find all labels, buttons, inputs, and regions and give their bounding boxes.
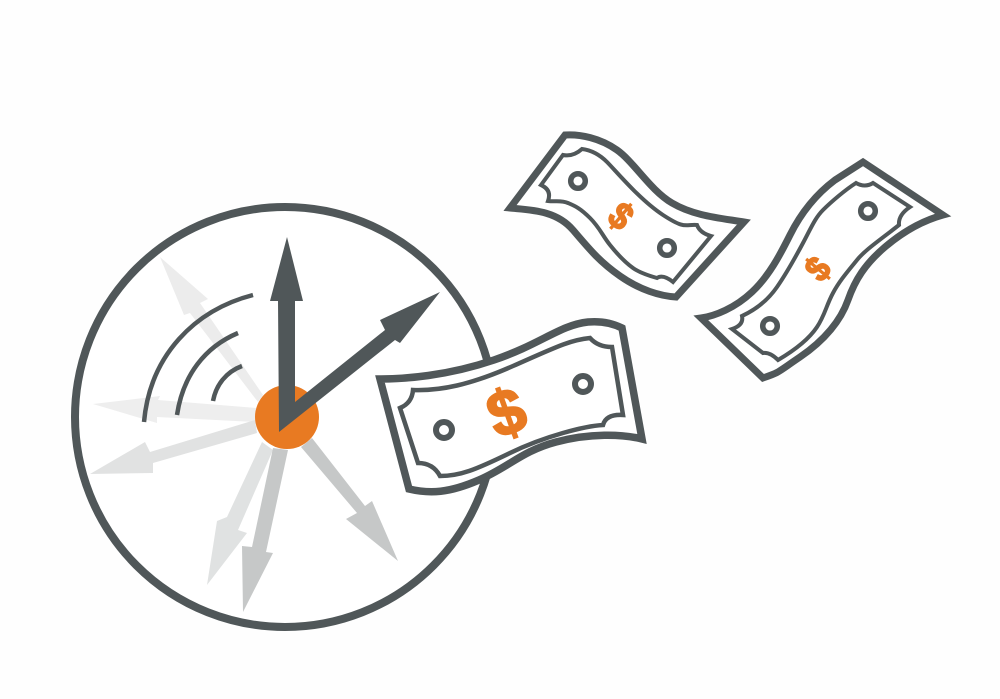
arrow: west ghost hand	[93, 396, 256, 423]
coin circle right	[575, 376, 591, 392]
arrow: north-west ghost hand	[160, 257, 263, 402]
arrow: south-east ghost hand	[301, 438, 398, 561]
coin circle upper right	[861, 204, 875, 218]
arrow: south ghost hand	[242, 448, 288, 612]
arrow: west-south-west ghost hand	[90, 420, 257, 474]
banknote: upper	[510, 135, 744, 297]
dollar sign: $	[797, 250, 839, 289]
coin circle upper left	[571, 174, 585, 188]
coin circle lower right	[660, 241, 674, 255]
clock hub	[255, 385, 319, 449]
motion arrows: faded clock hands	[90, 257, 398, 612]
dollar sign: $	[477, 372, 536, 452]
banknote: right	[701, 162, 943, 378]
banknote: large	[380, 322, 642, 492]
clock face	[75, 207, 495, 627]
coin circle lower left	[763, 319, 777, 333]
arrow: south-south-west ghost hand	[207, 442, 273, 585]
dollar sign: $	[600, 193, 642, 239]
coin circle left	[436, 422, 452, 438]
clock hands	[270, 237, 440, 432]
motion arcs	[144, 295, 253, 422]
